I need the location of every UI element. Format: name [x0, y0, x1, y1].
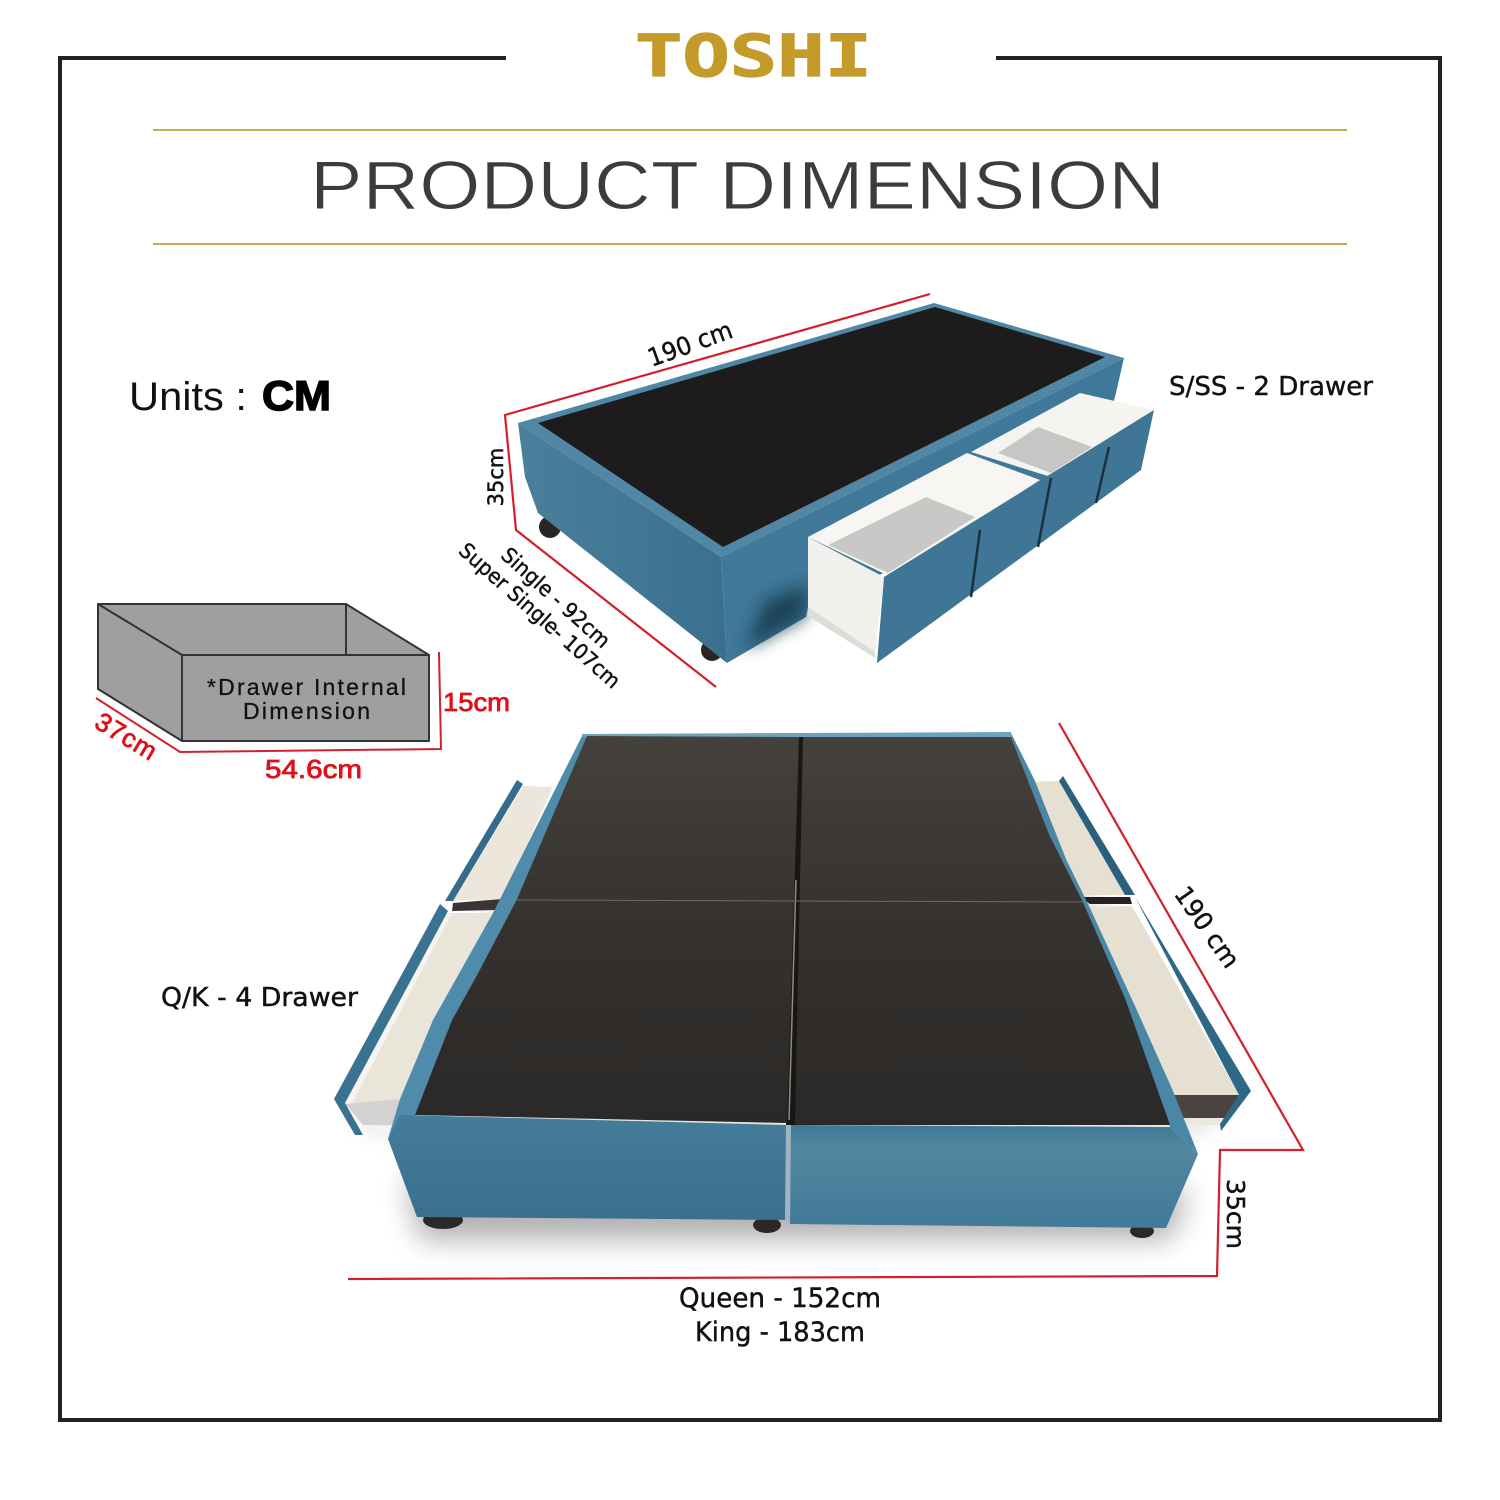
right face	[721, 358, 1124, 663]
box caption: *Drawer Internal	[207, 674, 406, 700]
brand logo: TOSHI: TOSHI	[635, 22, 872, 90]
queen/king labels: Queen - 152cm	[679, 1283, 881, 1314]
single bed labels: 35cm	[484, 448, 508, 506]
box dimensions: 15cm	[443, 687, 510, 717]
units label: CM	[262, 372, 331, 419]
right rim	[1011, 733, 1198, 1154]
right front face	[790, 1125, 1198, 1228]
queen/king labels: Q/K - 4 Drawer	[161, 983, 358, 1013]
single bed labels: Super Single- 107cm	[454, 538, 625, 693]
queen/king labels: 190 cm	[1168, 881, 1246, 974]
front drawer	[808, 453, 1040, 658]
black top right	[795, 737, 1170, 1125]
rear drawer	[971, 393, 1154, 477]
drawer internal dimension box	[90, 604, 510, 784]
left rear drawer	[445, 780, 553, 911]
shadow	[405, 1180, 1190, 1240]
right rear drawer	[1030, 776, 1135, 904]
single bed labels	[454, 315, 1373, 693]
left face	[518, 423, 727, 663]
single bed labels: Single - 92cm	[496, 543, 615, 653]
right front drawer	[1085, 897, 1251, 1131]
box caption	[207, 674, 406, 724]
title block: PRODUCT DIMENSION	[310, 147, 1165, 224]
box dimensions	[90, 687, 510, 784]
drawer fronts	[877, 410, 1154, 663]
single bed labels: S/SS - 2 Drawer	[1169, 372, 1373, 402]
queen/king labels	[161, 881, 1250, 1348]
feet	[423, 1211, 1154, 1238]
left rim	[388, 736, 590, 1139]
units label: Units :	[129, 375, 247, 419]
queen/king dimension lines	[348, 723, 1303, 1279]
single bed labels: 190 cm	[644, 315, 736, 373]
box dimensions: 37cm	[90, 706, 163, 767]
box dimensions: 54.6cm	[265, 754, 362, 784]
left front drawer	[334, 904, 500, 1135]
single bed dimension lines	[505, 294, 930, 687]
single bed with 2 drawers	[518, 303, 1154, 663]
feet	[539, 516, 723, 661]
black top	[538, 307, 1105, 547]
black top left	[415, 736, 799, 1123]
left front face	[388, 1115, 788, 1220]
queen/king bed with 4 drawers	[334, 732, 1251, 1240]
queen/king labels: 35cm	[1221, 1179, 1250, 1249]
top rim	[518, 303, 1124, 557]
box caption: Dimension	[243, 698, 370, 724]
queen/king labels: King - 183cm	[695, 1317, 865, 1348]
front face gap	[785, 1125, 792, 1224]
center gap	[786, 737, 804, 1125]
units label	[129, 372, 331, 419]
